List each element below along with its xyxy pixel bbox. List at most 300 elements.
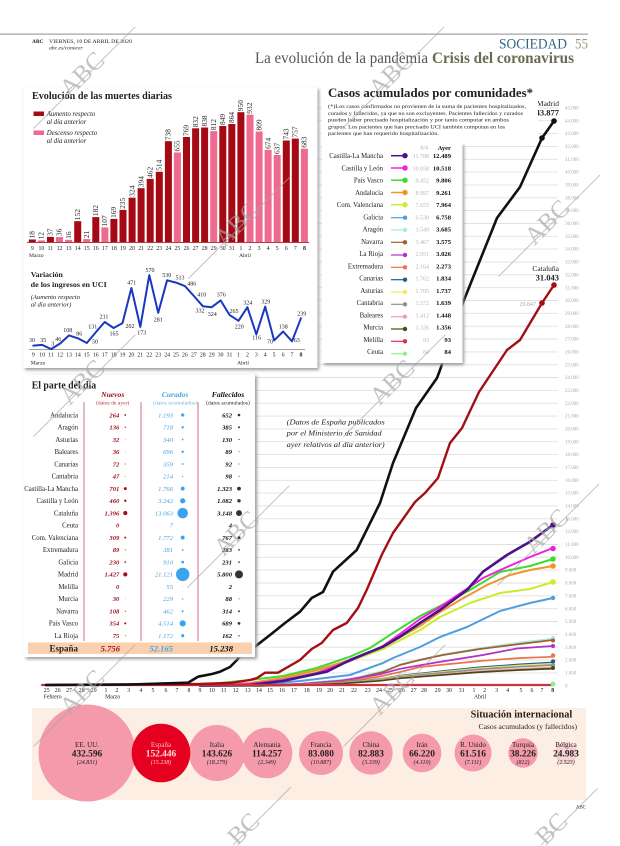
row: Aragón: Aragón (58, 425, 79, 432)
table header: 8/4 (420, 146, 428, 152)
row: Navarra: Navarra (361, 239, 383, 246)
row: Extremadura: 89 (113, 547, 120, 554)
lines: smaller communities (200, 639, 553, 686)
labels: Madrid: Madrid (537, 99, 559, 108)
y axis scale labels: 36.000 (565, 222, 579, 227)
line chart: ICU admissions: 23 (155, 352, 161, 358)
bubble: Irán (403, 734, 441, 772)
credit: ABC (576, 806, 586, 810)
bubble: EE. UU.: EE. UU. (75, 741, 99, 749)
legend: deaths bars (34, 111, 98, 145)
y axis scale labels: 20.000 (565, 428, 579, 432)
heading: ICU admissions (31, 270, 107, 308)
row: Com. Valenciana: 7.964 (436, 202, 452, 209)
line chart: ICU admissions: 70 (267, 340, 273, 346)
bar chart: daily deaths: 738 (164, 129, 173, 140)
date axis: Abril (474, 694, 487, 700)
row: Com. Valenciana: 767 (222, 535, 233, 542)
date axis: 8 (188, 688, 191, 694)
row: Melilla: 2 (228, 584, 233, 591)
y axis scale labels: 6.000 (565, 607, 577, 612)
line chart: ICU admissions: 16 (93, 352, 99, 358)
bar chart: daily deaths: 394 (136, 176, 145, 187)
y axis scale labels: 24.000 (565, 376, 579, 381)
bubble: R. Unido: 61.516 (460, 750, 486, 760)
row: Extremadura: 2.164 (416, 264, 429, 270)
row: Castilla y León: 1.082 (217, 498, 233, 505)
date axis: 28 (421, 688, 427, 694)
bubble: Italia: (18.279) (207, 759, 227, 766)
bar chart: daily deaths: 13 (66, 246, 72, 252)
bar chart: daily deaths: 769 (182, 125, 191, 136)
row: Galicia: 910 (163, 559, 174, 566)
date axis: Marzo (105, 694, 120, 700)
line chart: ICU admissions: 239 (297, 311, 306, 317)
bar chart: daily deaths: 36 (55, 228, 64, 236)
row: Melilla (58, 584, 233, 591)
y axis scale labels: 40.000 (565, 171, 579, 176)
bar chart: daily deaths: 4 (267, 246, 270, 252)
bar chart: daily deaths: 31 (229, 246, 235, 252)
row: País Vasco: 354 (108, 621, 120, 628)
heading: ICU admissions: Variación (31, 270, 64, 279)
heading: Situación internacional: Situación internacional (471, 710, 572, 720)
bubble: Bélgica (553, 741, 579, 766)
row: Andalucía (355, 190, 451, 197)
y axis scale labels: 39.000 (565, 184, 579, 188)
explanatory note (328, 103, 527, 137)
line chart: ICU admissions: 486 (187, 281, 196, 287)
row: La Rioja (359, 251, 452, 258)
date axis: 25 (387, 688, 393, 694)
row: Canarias: 359 (162, 461, 174, 468)
line chart: ICU admissions: 471 (127, 280, 136, 286)
row: Asturias: 32 (112, 437, 120, 444)
y axis scale labels: 4.000 (565, 633, 577, 638)
row: Navarra: Navarra (56, 608, 78, 616)
bar chart: daily deaths: 838 (200, 115, 209, 126)
watermarks: ABC (210, 197, 265, 252)
row: Aragón: 718 (163, 425, 174, 432)
y axis scale labels: 5.000 (565, 620, 577, 625)
row: Cantabria: 1.639 (436, 300, 452, 307)
bar chart: daily deaths: 25 (175, 246, 180, 252)
row: Murcia: 30 (112, 596, 120, 603)
row: Canarias: Canarias (359, 276, 383, 283)
row: Galicia: 230 (108, 559, 120, 566)
row: Murcia: Murcia (363, 325, 383, 332)
bar chart: daily deaths: 20 (129, 246, 135, 252)
line chart: ICU admissions: 22 (146, 352, 152, 358)
row: Castilla y León: 10.518 (433, 165, 452, 172)
date axis: 10 (209, 688, 215, 694)
heading: ICU admissions: (Aumento respecto (31, 294, 81, 301)
panel: accumulated cases by region (322, 85, 538, 365)
chart: accumulated cases line chart (42, 99, 579, 700)
bar chart: daily deaths: 24 (166, 246, 171, 252)
row: Aragón: 136 (109, 425, 120, 432)
line chart: ICU admissions: 108 (63, 328, 72, 334)
row: Baleares: 1.448 (436, 312, 452, 319)
date axis: 26 (55, 688, 61, 694)
legend: deaths bars: Descenso respecto (46, 130, 98, 137)
row: Navarra: 3.575 (436, 239, 452, 246)
bubble: Irán: (4.110) (413, 759, 431, 766)
date axis: 31 (459, 688, 465, 694)
row: Andalucía: 9.261 (436, 190, 451, 197)
row: Castilla y León (341, 165, 452, 172)
bar chart: daily deaths: 15 (84, 246, 90, 252)
column headers: (datos de ayer) (96, 400, 129, 406)
explanatory note: (*)Los casos confirmados no provienen de la suma de pacientes hospitalizados, (328, 103, 527, 110)
line chart: ICU admissions: 10 (39, 352, 45, 358)
row: Andalucía (50, 412, 240, 419)
bar chart: daily deaths: 655 (173, 140, 182, 152)
date axis: 12 (233, 688, 239, 694)
bar chart: daily deaths (27, 100, 309, 259)
date axis: 7 (541, 688, 544, 694)
row: Cataluña: Cataluña (54, 510, 78, 517)
line chart: ICU admissions: 265 (230, 309, 238, 315)
explanatory note: pacientes que han requerido hospitalización. (328, 131, 440, 137)
row: Aragón: 3.549 (416, 228, 429, 234)
bubble: Alemania: 114.257 (252, 750, 282, 760)
row: Com. Valenciana: Com. Valenciana (337, 202, 383, 209)
bar chart: daily deaths: 12 (37, 232, 46, 239)
bar chart: daily deaths: Marzo (29, 253, 44, 259)
line chart: ICU admissions: 1 (237, 352, 240, 358)
page header: 55 (575, 36, 588, 52)
bar chart: daily deaths: Abril (239, 253, 251, 259)
date axis: 28 (79, 688, 85, 694)
bubble: R. Unido (454, 734, 492, 772)
bubble: España: (15.238) (151, 759, 171, 766)
date axis: 19 (316, 688, 322, 694)
row: Baleares (55, 449, 240, 456)
line chart: ICU admissions: 116 (252, 336, 261, 342)
row: España total: España (49, 644, 78, 654)
row: Madrid: Madrid (58, 572, 79, 579)
bubble: Alemania: (2.349) (258, 759, 276, 766)
row: Castilla y León: Castilla y León (36, 498, 79, 505)
bar chart: daily deaths: 107 (100, 215, 109, 226)
row: Castilla-La Mancha: 1.323 (217, 486, 233, 493)
y axis scale labels: 35.000 (565, 235, 579, 240)
table header: Ayer (438, 145, 451, 152)
bar chart: daily deaths: 8 (303, 246, 306, 252)
date axis: 23 (365, 688, 371, 694)
bubble: España (132, 724, 190, 782)
line chart: ICU admissions: 4 (264, 352, 267, 358)
bar chart: daily deaths: 182 (91, 205, 100, 216)
row: Cantabria: 1.572 (416, 301, 429, 307)
date axis: 29 (91, 688, 97, 694)
y axis scale labels: 11.000 (565, 543, 579, 548)
row: Melilla: Melilla (58, 584, 78, 591)
line chart: ICU admissions: 324 (243, 300, 252, 306)
row: Asturias: 340 (162, 437, 174, 444)
row: País Vasco: 9.806 (436, 178, 452, 184)
date axis: 5 (520, 688, 523, 694)
row: Madrid: 1.427 (104, 572, 120, 579)
page header: ABC (32, 39, 43, 45)
date axis: 30 (446, 688, 452, 694)
line chart: ICU admissions: 24 (164, 352, 170, 358)
y axis scale labels: 7.000 (565, 594, 577, 599)
bar chart: daily deaths: 21 (82, 230, 91, 238)
date axis: 6 (531, 688, 534, 694)
lines: larger communities (200, 525, 553, 686)
row: Baleares: 1.412 (416, 313, 429, 319)
line chart: ICU admissions: 86 (76, 331, 82, 337)
date axis: 1 (105, 688, 108, 694)
line chart: ICU admissions: Abril (237, 360, 249, 366)
line chart: ICU admissions: 173 (137, 331, 146, 337)
bubble: R. Unido: R. Unido (460, 741, 486, 749)
bar chart: daily deaths: 849 (218, 114, 227, 125)
y axis scale labels: 25.000 (565, 363, 579, 368)
line chart: ICU admissions: 530 (162, 273, 171, 279)
row: Canarias: 72 (113, 461, 120, 468)
row: Cataluña: 3.148 (216, 510, 233, 517)
row: Extremadura: Extremadura (43, 547, 78, 554)
bar chart: daily deaths: 743 (282, 128, 290, 140)
y axis scale labels: 44.000 (565, 119, 579, 124)
row: Asturias (55, 437, 240, 444)
bar chart: daily deaths: 7 (294, 246, 297, 252)
date axis: 4 (506, 688, 509, 694)
bubble: España: 152.446 (146, 750, 177, 760)
y axis scale labels: 19.000 (565, 440, 579, 445)
bar chart: daily deaths: 27 (193, 246, 199, 252)
heading: ICU admissions: de los ingresos en UCI (31, 280, 107, 289)
subheading: Casos acumulados (y fallecidos) (478, 723, 578, 731)
bar chart: daily deaths: 21 (138, 246, 144, 252)
bubble: Francia: Francia (310, 741, 332, 749)
row: Galicia: Galicia (363, 214, 383, 221)
y axis scale labels: 43.000 (565, 132, 579, 137)
bar chart: daily deaths: 37 (46, 228, 55, 236)
row: Castilla y León: 460 (108, 498, 120, 505)
line chart: ICU admissions: 11 (48, 352, 54, 358)
bubble: China: (3.339) (362, 759, 380, 766)
row: La Rioja: 162 (222, 633, 233, 640)
line chart: ICU admissions: 50 (92, 340, 98, 346)
row: España total: 5.756 (101, 644, 121, 654)
watermarks: ABC (520, 195, 575, 250)
date axis: 18 (304, 688, 310, 694)
bubble: Francia: 83.080 (308, 750, 334, 760)
row: Canarias (54, 461, 240, 468)
bubble: Bélgica: Bélgica (555, 741, 578, 749)
row: Castilla y León: 3.242 (157, 498, 174, 505)
line chart: ICU admissions: 5 (273, 352, 276, 358)
row: Andalucía: 1.193 (158, 412, 174, 419)
row: Asturias: 1.705 (416, 289, 429, 295)
row: Baleares: 89 (225, 449, 233, 456)
bar chart: daily deaths: 9 (31, 246, 34, 252)
bar chart: daily deaths: 19 (120, 246, 126, 252)
bubble: Turquía (508, 738, 538, 768)
row: Murcia: 229 (163, 596, 174, 603)
row: Com. Valenciana: 7.655 (416, 203, 429, 209)
row: Canarias: 92 (225, 461, 233, 468)
row: Castilla-La Mancha: 11.788 (413, 154, 429, 160)
line chart: ICU admissions: 27 (191, 352, 197, 358)
date axis: 29 (435, 688, 441, 694)
row: Extremadura: 381 (162, 547, 173, 554)
bubble: Francia (299, 731, 343, 775)
bar chart: daily deaths: 26 (184, 246, 190, 252)
line chart: ICU admissions: 165 (110, 331, 118, 337)
bar chart: daily deaths: 809 (254, 119, 263, 130)
table header (420, 145, 451, 152)
y axis scale labels: 29.000 (565, 312, 579, 317)
y axis scale labels (565, 106, 579, 689)
date axis: 3 (495, 688, 498, 694)
row: Aragón (363, 227, 452, 234)
heading: El parte del día: El parte del día (32, 380, 97, 392)
line chart: ICU admissions: 29 (209, 352, 215, 358)
date axis: 27 (411, 688, 417, 694)
date axis: Febrero (44, 694, 62, 700)
row: Navarra: 108 (109, 608, 120, 616)
bar chart: daily deaths: 683 (300, 136, 309, 148)
line chart: ICU admissions: 3 (51, 341, 54, 347)
y axis scale labels: 10.000 (565, 556, 579, 561)
bar chart: daily deaths: 22 (147, 246, 153, 252)
bar chart: daily deaths: 10 (39, 246, 44, 252)
line chart: ICU admissions: 18 (111, 352, 117, 358)
row: Murcia (58, 596, 239, 603)
date axis: 2 (116, 688, 119, 694)
line chart: ICU admissions: 332 (196, 309, 204, 315)
row: País Vasco: 9.452 (416, 178, 429, 184)
bar chart: daily deaths: 950 (236, 100, 245, 111)
row: Melilla: 0 (116, 584, 120, 591)
row: La Rioja: 3.026 (436, 251, 452, 258)
bar chart: daily deaths: 757 (290, 126, 300, 138)
y axis scale labels: 27.000 (565, 338, 579, 343)
y axis scale labels: 23.000 (565, 389, 579, 394)
labels: Madrid (520, 99, 560, 142)
row: Madrid (58, 568, 243, 581)
row: Castilla-La Mancha: 701 (109, 486, 119, 493)
legend: deaths bars: al día anterior (47, 119, 87, 126)
bar chart: daily deaths: 18 (111, 246, 117, 252)
line chart: ICU admissions: 376 (217, 292, 226, 298)
bar chart: daily deaths: 29 (211, 246, 217, 252)
row: Cantabria: 214 (163, 474, 174, 481)
bubble: Francia: (10.887) (311, 759, 331, 766)
y axis scale labels: 18.000 (565, 453, 579, 458)
annotation: data source: ayer relativos al día anterior) (287, 440, 385, 449)
heading: Casos acumulados por comunidades: Casos acumulados por comunidades* (328, 85, 533, 100)
legend: deaths bars: al día anterior (47, 138, 87, 145)
date axis: 17 (291, 688, 297, 694)
row: Castilla-La Mancha: 1.766 (158, 486, 174, 493)
row: La Rioja: La Rioja (359, 251, 383, 258)
line chart: ICU admissions: 15 (84, 352, 90, 358)
row: Com. Valenciana (32, 535, 240, 542)
row: Aragón: 385 (221, 425, 233, 432)
row: Cantabria (357, 300, 452, 307)
line chart: ICU admissions: 202 (126, 324, 134, 330)
row: Ceuta: 4 (228, 523, 233, 530)
row: Castilla-La Mancha: Castilla-La Mancha (329, 153, 383, 160)
row: Ceuta: 7 (170, 523, 174, 530)
row: La Rioja: La Rioja (54, 633, 78, 640)
y axis scale labels: 45.000 (565, 106, 579, 112)
y axis scale labels: 26.000 (565, 350, 579, 356)
date axis: 8 (551, 688, 554, 694)
line chart: ICU admissions: 410 (197, 292, 206, 298)
line chart: ICU admissions: 513 (176, 275, 184, 281)
labels: Cataluña: 29.847 (520, 302, 536, 308)
row: Murcia: 1.356 (436, 325, 452, 332)
bubble: Turquía: Turquía (512, 741, 535, 749)
bubble: EE. UU.: (24.831) (77, 759, 97, 766)
row: Galicia (58, 559, 240, 566)
bar chart: daily deaths: 16 (93, 246, 99, 252)
row: La Rioja: 2.951 (416, 252, 429, 258)
row: Murcia (363, 325, 452, 332)
heading: ICU admissions: al día anterior) (31, 302, 71, 308)
row: Asturias: 130 (222, 437, 233, 444)
line chart: ICU admissions: 211 (100, 315, 108, 321)
column headers (96, 390, 250, 406)
line chart: ICU admissions: 26 (182, 352, 188, 358)
date axis: 15 (267, 688, 273, 694)
bubble: Italia (189, 725, 245, 781)
bar chart: daily deaths: 864 (227, 112, 236, 123)
row: Madrid: 5.800 (217, 572, 233, 579)
row: Melilla: 93 (444, 337, 452, 344)
line chart: ICU admissions: 9 (32, 352, 35, 358)
bubble: China (349, 731, 393, 775)
row: País Vasco (49, 620, 240, 628)
bar chart: daily deaths: 152 (73, 209, 82, 220)
row: Murcia: Murcia (58, 596, 78, 603)
row: Castilla-La Mancha (24, 486, 241, 493)
row: Aragón (58, 425, 240, 432)
line chart: ICU admissions: 25 (173, 352, 179, 358)
y axis scale labels: 38.000 (565, 196, 579, 201)
bar chart: daily deaths: 23 (156, 246, 162, 252)
bar chart: daily deaths: 12 (57, 246, 62, 252)
labels: Madrid: 42.450 (520, 136, 537, 142)
column headers: (datos acumulados) (153, 400, 197, 406)
bar chart: daily deaths: 462 (145, 167, 154, 178)
y axis scale labels: 2.000 (565, 659, 577, 664)
row: Extremadura: Extremadura (348, 263, 383, 270)
date axis: 24 (376, 688, 382, 694)
row: Melilla: 55 (166, 584, 174, 591)
page header (0, 33, 588, 67)
row: Baleares: 696 (163, 449, 174, 456)
bar chart: daily deaths: 514 (154, 159, 164, 171)
line chart: ICU admissions: 30 (29, 338, 35, 344)
bubble: España: España (151, 741, 172, 749)
legend: deaths bars: Aumento respecto (46, 111, 96, 118)
bar chart: daily deaths: 932 (245, 102, 254, 114)
line chart: ICU admissions: 570 (146, 268, 154, 274)
date axis (44, 688, 554, 700)
line chart: ICU admissions: 6 (282, 352, 285, 358)
row: Com. Valenciana: 309 (108, 535, 120, 542)
bar chart: daily deaths: 17 (102, 246, 108, 252)
bar chart: daily deaths: 812 (209, 119, 218, 130)
